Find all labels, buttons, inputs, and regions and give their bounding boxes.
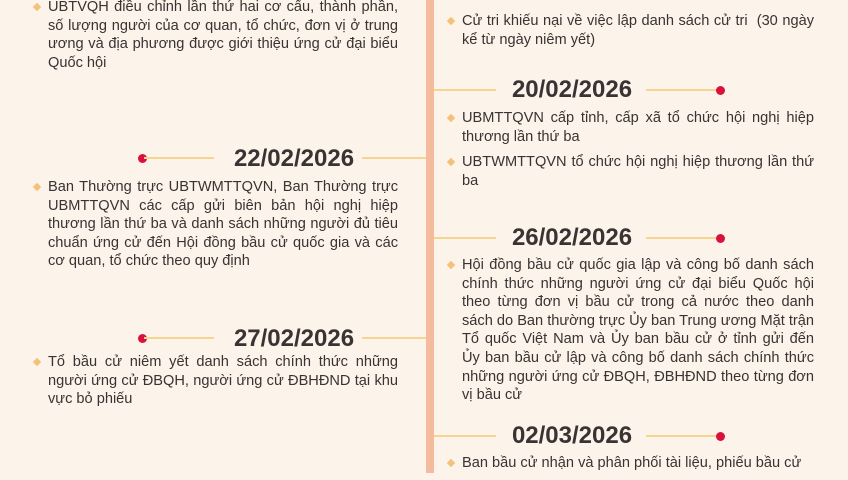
date 20/02/2026: 20/02/2026 xyxy=(512,76,632,103)
left text block: top: UBTVQH điều chỉnh lần thứ hai cơ cấu, thành phần, số lượng người của cơ quan, tổ chức, đơn vị ở trung ương và địa phương được giới thiệu ứng cử đại biểu Quốc hội xyxy=(48,0,398,71)
left text block: 27/02: Tổ bầu cử niêm yết danh sách chính thức những người ứng cử ĐBQH, người ứng cử ĐBHĐND tại khu vực bỏ phiếu xyxy=(48,354,398,407)
date 22/02/2026: 22/02/2026 xyxy=(234,145,354,172)
right text block: top: Cử tri khiếu nại về việc lập danh sách cử tri (30 ngày kể từ ngày niêm yết) xyxy=(462,13,814,48)
date 27/02/2026 xyxy=(138,325,426,352)
date 26/02/2026 xyxy=(434,224,725,251)
date 22/02/2026 xyxy=(138,145,426,172)
date 27/02/2026: 27/02/2026 xyxy=(234,325,354,352)
left text block: 22/02: Ban Thường trực UBTWMTTQVN, Ban Thường trực UBMTTQVN các cấp gửi biên bản hội nghị hiệp thương lần thứ ba và danh sách những người đủ tiêu chuẩn ứng cử đến Hội đồng bầu cử quốc gia và các cơ quan, tổ chức theo quy định xyxy=(48,179,398,269)
date 26/02/2026: 26/02/2026 xyxy=(512,224,632,251)
right text block: 20/02: UBMTTQVN cấp tỉnh, cấp xã tổ chức hội nghị hiệp thương lần thứ ba xyxy=(462,110,814,145)
right text block: 20/02 xyxy=(446,110,814,189)
date 02/03/2026 xyxy=(434,422,725,449)
date 02/03/2026: 02/03/2026 xyxy=(512,422,632,449)
right text block: 26/02: Hội đồng bầu cử quốc gia lập và công bố danh sách chính thức những người ứng cử đại biểu Quốc hội theo từng đơn vị bầu cử trong cả nước theo danh sách do Ban thường trực Ủy ban Trung ương Mặt trận Tổ quốc Việt Nam và Ủy ban bầu cử ở tỉnh gửi đến Ủy ban bầu cử lập và công bố danh sách chính thức những người ứng cử ĐBQH, ĐBHĐND theo từng đơn vị bầu cử xyxy=(462,257,814,403)
timeline bar xyxy=(426,0,434,473)
right text block: 02/03: Ban bầu cử nhận và phân phối tài liệu, phiếu bầu cử xyxy=(462,455,801,471)
right text block: 20/02: UBTWMTTQVN tổ chức hội nghị hiệp thương lần thứ ba xyxy=(462,154,814,189)
date 20/02/2026 xyxy=(434,76,725,103)
